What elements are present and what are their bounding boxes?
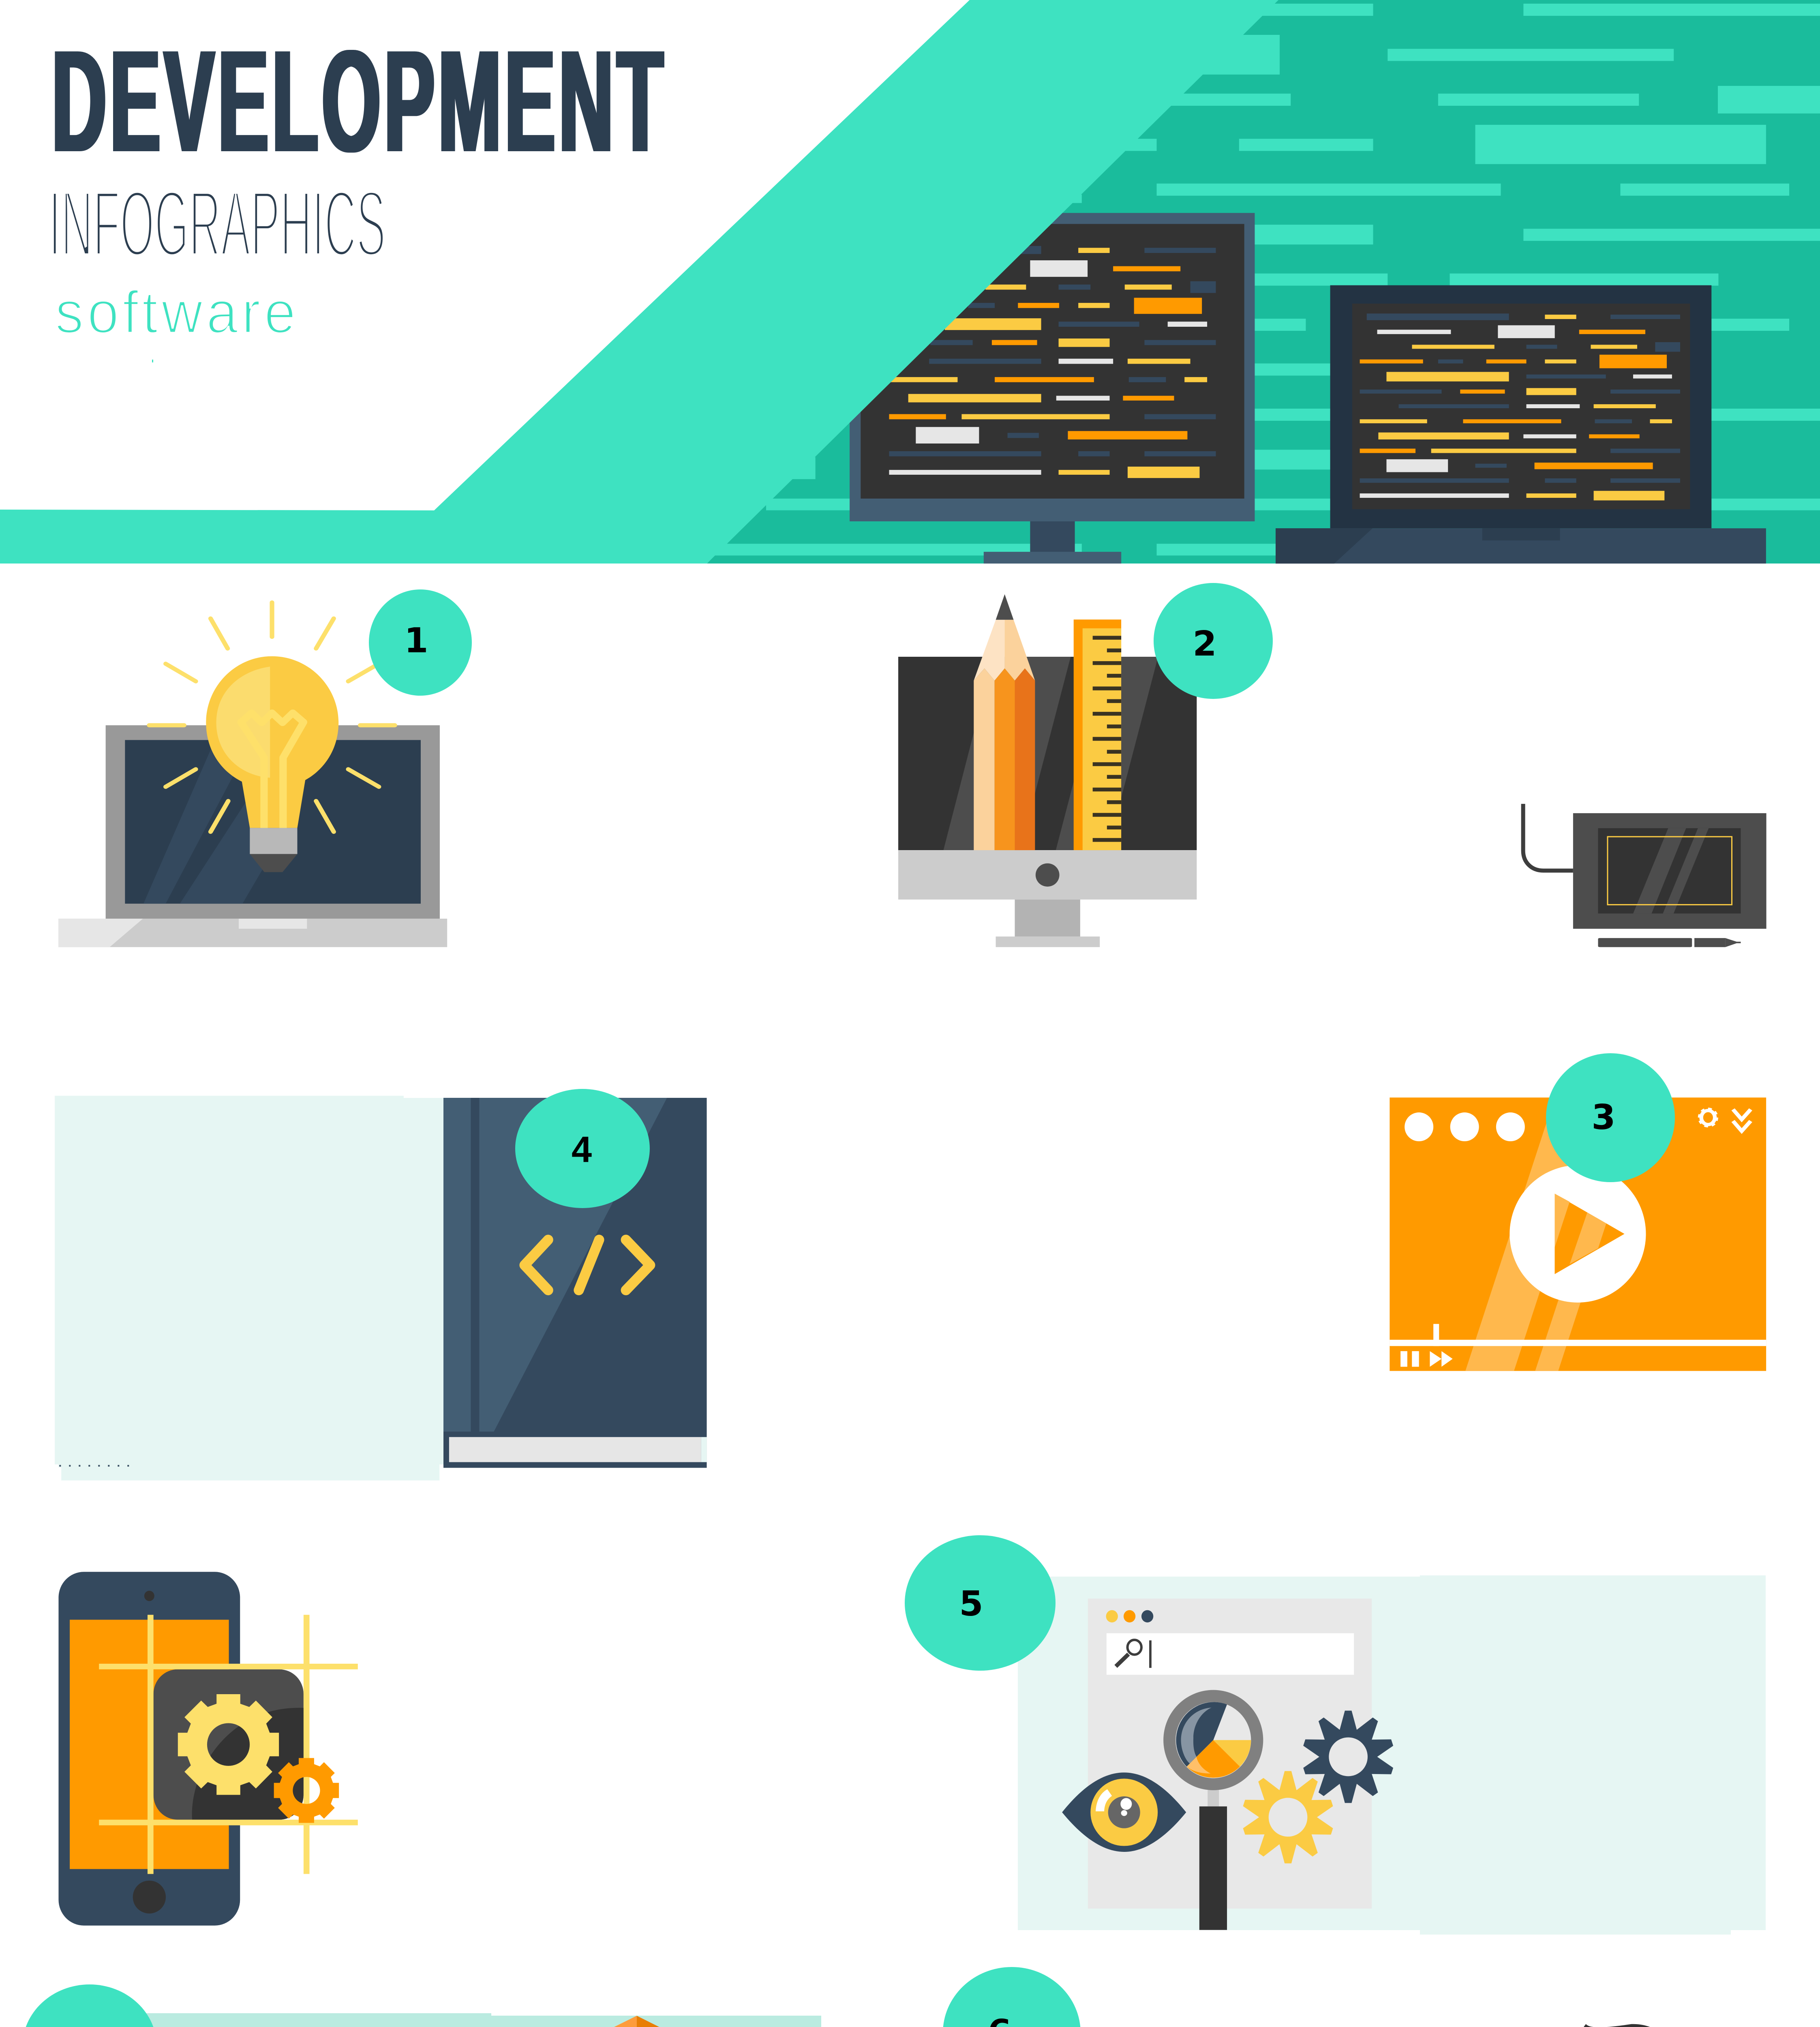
panel 5: search and analysis: [905, 1535, 1766, 1935]
pale text panel: [55, 1096, 443, 1481]
header diagonal teal shape: [0, 0, 1278, 564]
panel 2: design monitor and tablet: [898, 583, 1766, 947]
badge 5: 5: [959, 1584, 983, 1624]
badge 3: 3: [1591, 1097, 1616, 1138]
header dark teal background: [707, 0, 1820, 564]
badge 3: [1546, 1053, 1675, 1182]
icon: drawing tablet and pen: [1523, 804, 1766, 947]
icon: developer with glasses: [1510, 2024, 1739, 2027]
icon: monitor with pencil and ruler: [898, 594, 1197, 947]
security text panel: [58, 2013, 821, 2027]
badge 5: [905, 1535, 1056, 1671]
subtitle: software: software: [55, 279, 296, 346]
icon: laptop with code: [1276, 285, 1766, 564]
header banner: [0, 0, 1820, 564]
badge 4: 4: [572, 1129, 592, 1170]
panel 3: video player: [1390, 1053, 1766, 1371]
badge 2: [1154, 583, 1273, 699]
title: DEVELOPMENT: DEVELOPMENT: [52, 21, 663, 182]
panel 6: developer at laptop: [943, 1967, 1739, 2027]
badge 7: [22, 1984, 157, 2027]
badge 1: [369, 589, 472, 696]
icon: code book: [443, 1098, 707, 1468]
icon: video player window: [1390, 1097, 1766, 1371]
badge 2: 2: [1193, 624, 1217, 664]
panel 7: security: [22, 1984, 822, 2027]
subtitle: INFOGRAPHICS: INFOGRAPHICS: [49, 171, 386, 276]
panel: mobile app settings: [58, 1572, 358, 1926]
icon: search analytics: [1062, 1598, 1393, 1930]
badge 6: [943, 1967, 1081, 2027]
header code-pattern bars: [707, 4, 1820, 555]
icon: desktop monitor with code: [850, 213, 1255, 564]
icon: shield and padlock: [527, 2016, 822, 2027]
badge 4: [515, 1089, 650, 1208]
icon: idea laptop: [58, 602, 447, 947]
badge 1: 1: [404, 621, 428, 661]
panel 1: laptop and light bulb: [58, 589, 472, 947]
panel 4: code book: [55, 1089, 707, 1481]
pale text panel: [1018, 1575, 1766, 1935]
